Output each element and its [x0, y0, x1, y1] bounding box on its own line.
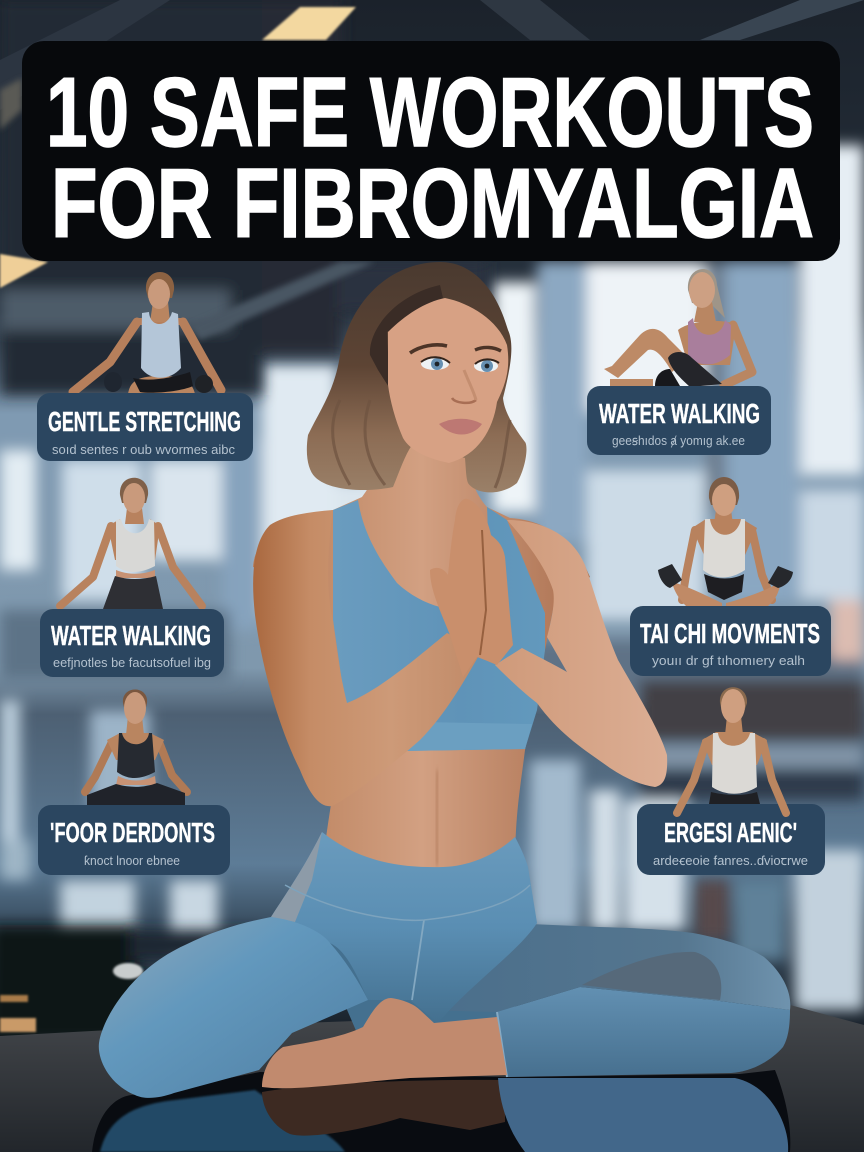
caption: poor derdonts: ƙnoct lnoor ebnee: [84, 853, 180, 868]
dark upper-left interior: [0, 0, 487, 395]
face: [388, 298, 508, 463]
exercise mat with reflection: [0, 1005, 864, 1152]
floor light reflections: [0, 963, 143, 1032]
title text: [46, 57, 814, 258]
right thigh: [420, 924, 790, 1012]
dark reflective floor, lower left: [0, 925, 260, 1040]
hips and waistband: [271, 832, 537, 1023]
exercise figure: top left kneeling stretch: [73, 272, 221, 394]
neck and torso: [253, 440, 590, 870]
ceiling beams and lights: [0, 0, 864, 340]
dark inner hair near cheek: [370, 285, 443, 392]
caption: poor derdonts: 'FOOR DERDONTS: [50, 817, 215, 848]
pants base fill: [300, 900, 540, 1040]
left arm: [253, 510, 482, 806]
bare foot: [262, 998, 507, 1088]
caption: gentle stretching: soıd sentes r oub wvormes aibc: [52, 442, 235, 457]
caption: tai chi movments: [630, 606, 831, 676]
caption: tai chi movments: youıı dr ɡf tıhomıery ealh: [652, 653, 805, 668]
thigh fold pocket: [582, 952, 721, 1000]
caption: water walking left: WATER WALKING: [51, 620, 211, 651]
right arm: [495, 520, 667, 787]
nose and lips: [439, 370, 482, 434]
exercise figure: right middle seated knees out: [658, 477, 793, 606]
caption: ergesi aenic: ardeꞓeoie fanres..ɗvioꞇrwe: [653, 853, 808, 868]
caption: ergesi aenic: [637, 804, 825, 875]
crop top hem: [400, 722, 532, 751]
caption: water walking right: WATER WALKING: [599, 398, 760, 429]
crop top: [333, 500, 545, 751]
caption: water walking right: [587, 386, 771, 455]
abdomen centre line: [436, 770, 438, 865]
left thigh and knee: [99, 917, 368, 1098]
eyes and brows: [410, 345, 501, 372]
right shin and knee: [497, 987, 790, 1077]
praying hands: [430, 499, 513, 677]
caption: gentle stretching: GENTLE STRETCHING: [48, 406, 241, 437]
caption: water walking right: geeꞩhıdos ⱥ yomıg ak.ee: [612, 433, 745, 448]
main woman seated in prayer pose: [99, 262, 790, 1098]
leg reflection on mat: [100, 1090, 345, 1152]
hair wave strands: [333, 400, 510, 488]
left hip grey highlight: [271, 832, 322, 922]
exercise figure: right lower standing arms down: [677, 687, 786, 813]
caption: water walking left: [40, 609, 224, 677]
caption: water walking left: eefjnotles be facutsofuel ibg: [53, 655, 211, 670]
exercise figure: left lower seated cross-legged: [85, 690, 187, 805]
hair: [307, 262, 526, 492]
exercise figure: left middle seated hands down: [60, 478, 202, 609]
caption: poor derdonts: [38, 805, 230, 875]
title banner: [22, 41, 840, 261]
exercise figure: right top twisting seated: [604, 269, 752, 387]
caption: gentle stretching: [37, 393, 253, 461]
